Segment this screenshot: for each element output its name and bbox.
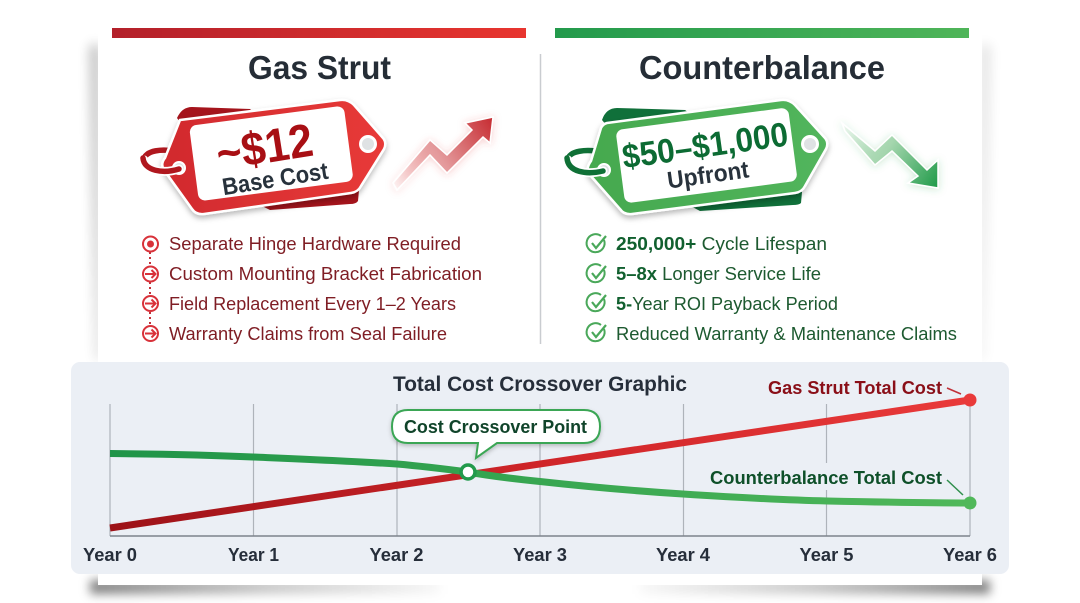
card shadow: [90, 45, 990, 594]
x axis labels: Year 1: [228, 545, 279, 565]
icon: check: [587, 323, 606, 341]
list item: Field Replacement Every 1–2 Years: [169, 293, 456, 314]
icon: arrow circle: [143, 266, 158, 282]
label: counterbalance total cost: [710, 468, 963, 495]
red header bar: [112, 28, 526, 38]
list item: 5-Year ROI Payback Period: [616, 293, 838, 314]
price tag: base cost: [143, 100, 385, 214]
label: counterbalance total cost: Counterbalance Total Cost: [710, 468, 942, 488]
x axis labels: [83, 545, 997, 565]
icon: arrow circle: [143, 326, 158, 341]
price tag: base cost: Base Cost: [220, 158, 330, 201]
price tag: upfront: [567, 100, 827, 214]
heading: Counterbalance: Counterbalance: [639, 49, 885, 86]
icon: arrow circle: [143, 296, 158, 311]
list item: Separate Hinge Hardware Required: [169, 233, 461, 254]
icon: check: [587, 234, 606, 252]
icon: check: [587, 293, 606, 311]
icon: check: [587, 264, 606, 282]
line: gas strut total cost: [110, 394, 976, 528]
icon: target: [143, 236, 158, 252]
crossover point marker: [461, 465, 475, 479]
price tag: upfront: $50–$1,000: [620, 116, 790, 176]
panel: total cost chart: [71, 362, 1009, 574]
panel: counterbalance: [567, 49, 957, 344]
arrow: cost falling: [842, 123, 938, 188]
heading: Gas Strut: Gas Strut: [248, 49, 391, 86]
x axis labels: Year 5: [800, 545, 854, 565]
line: counterbalance total cost: [110, 454, 976, 510]
green header bar: [555, 28, 969, 38]
panel: gas strut: [143, 49, 493, 344]
arrow: cost rising: [393, 117, 493, 190]
list item: 250,000+ Cycle Lifespan: [616, 233, 827, 254]
x axis labels: Year 3: [513, 545, 567, 565]
list item: Warranty Claims from Seal Failure: [169, 323, 447, 344]
label: gas strut total cost: Gas Strut Total Cost: [768, 378, 942, 398]
x axis labels: Year 0: [83, 545, 137, 565]
price tag: base cost: ~$12: [212, 113, 317, 180]
list: gas strut drawbacks: [143, 233, 482, 344]
chart title: Total Cost Crossover Graphic: [393, 373, 687, 396]
callout: cost crossover point: Cost Crossover Point: [404, 417, 587, 437]
callout: cost crossover point: [392, 410, 600, 458]
list item: Reduced Warranty & Maintenance Claims: [616, 323, 957, 344]
x axis labels: Year 4: [656, 545, 710, 565]
main comparison card: [98, 28, 982, 585]
x axis labels: Year 2: [370, 545, 424, 565]
list item: Custom Mounting Bracket Fabrication: [169, 263, 482, 284]
x axis labels: Year 6: [943, 545, 997, 565]
list: counterbalance benefits: [587, 233, 957, 344]
list item: 5–8x Longer Service Life: [616, 263, 821, 284]
price tag: upfront: Upfront: [666, 156, 751, 195]
